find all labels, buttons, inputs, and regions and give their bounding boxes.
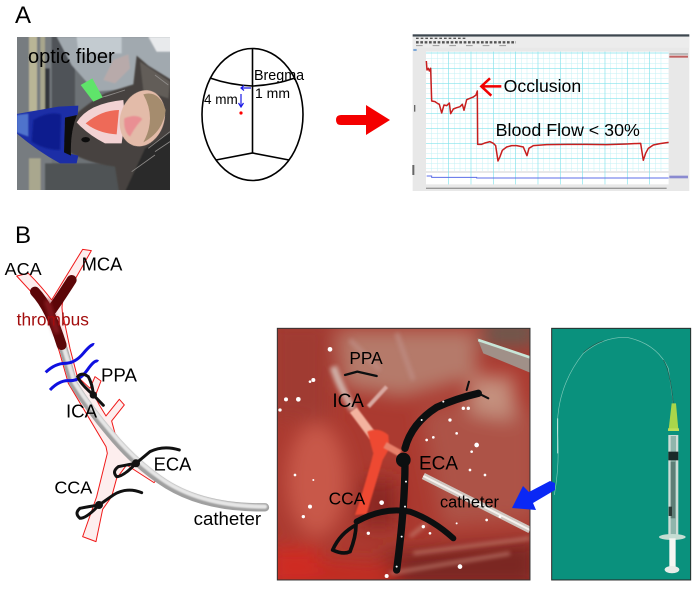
black sutures — [333, 372, 488, 570]
blue channel trace — [427, 176, 669, 178]
instrument — [477, 338, 530, 373]
suture knots — [77, 374, 179, 518]
ICA vessel — [333, 367, 353, 410]
thrombus — [35, 280, 72, 345]
photo labels: PPA — [349, 348, 383, 368]
Bregma label: Bregma — [254, 68, 304, 84]
ear — [120, 90, 166, 147]
catheter wire — [554, 337, 673, 495]
blue nose cone — [17, 106, 78, 163]
red blood flow trace — [426, 61, 669, 161]
4 mm label: 4 mm — [204, 92, 238, 107]
catheter label in photo: catheter — [440, 493, 500, 511]
1 mm label: 1 mm — [255, 85, 290, 101]
eye — [81, 137, 90, 142]
vessel diagram with catheter: MCA — [82, 253, 123, 274]
catheter label: catheter — [194, 508, 261, 529]
red target dot — [239, 111, 243, 115]
exposed skull — [77, 100, 125, 143]
panel label A: A — [15, 2, 31, 29]
red arrow — [336, 105, 390, 135]
skull diagram with Bregma — [202, 48, 304, 180]
blue arrow to catheter — [512, 481, 555, 510]
blood flow label: Blood Flow < 30% — [496, 120, 640, 140]
label: optic fiber: optic fiber — [28, 46, 115, 68]
blue vessel break lines — [46, 344, 98, 390]
vessel diagram with catheter: PPA — [101, 364, 137, 385]
specular highlights — [278, 347, 501, 578]
CCA vessel — [355, 430, 389, 515]
vessel diagram with catheter: CCA — [54, 477, 92, 497]
surgical photo: CCA — [329, 488, 366, 508]
red occlusion arrow — [481, 78, 501, 96]
mouse fur — [65, 56, 172, 192]
occlusion label: Occlusion — [504, 76, 581, 96]
thrombus label: thrombus — [17, 309, 89, 329]
vessel diagram with catheter: ICA — [66, 401, 98, 422]
blue measurement arrows — [238, 86, 251, 107]
laser doppler screenshot chart — [413, 34, 689, 191]
catheter — [63, 348, 265, 507]
surgical photo: ECA — [419, 454, 458, 475]
vessel outline — [17, 249, 158, 542]
syringe — [659, 403, 686, 573]
green tube — [81, 78, 103, 102]
vessel diagram with catheter: ECA — [154, 453, 192, 474]
surgical photo — [270, 320, 537, 587]
panel label B: B — [15, 222, 31, 249]
syringe photo — [552, 328, 691, 580]
surgical photo: ICA — [332, 391, 364, 412]
vessel labels: ACA — [5, 259, 42, 279]
vessel diagram with catheter — [5, 249, 265, 542]
catheter in photo — [423, 476, 530, 530]
photo: mouse with optic fiber — [15, 35, 175, 195]
